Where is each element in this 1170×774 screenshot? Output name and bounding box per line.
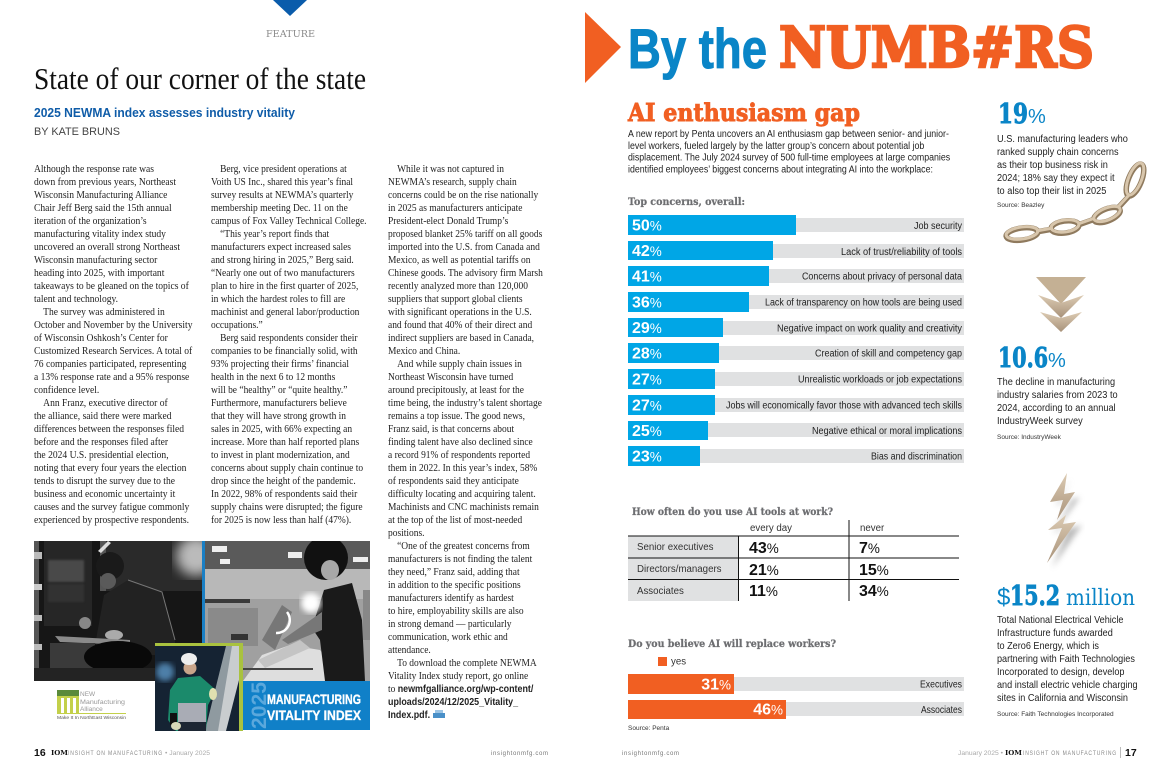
article column 1: Wisconsin manufacturing sector xyxy=(34,255,158,266)
footer: left page: IOM xyxy=(51,749,68,757)
intro text: level workers, fueled largely by the latter group’s concern about potential job xyxy=(628,140,924,151)
article column 2: Berg said respondents consider their xyxy=(220,333,358,344)
stat: 19%: to also top their list in 2025 xyxy=(997,186,1106,197)
table: ai tool use: 15% xyxy=(859,562,889,579)
article column 2: Berg, vice president operations at xyxy=(220,164,347,175)
stat: 19%: Source: Beazley xyxy=(997,202,1045,209)
logo: new manufacturing alliance: Alliance xyxy=(80,706,103,713)
table: ai tool use xyxy=(628,520,959,601)
logo: new manufacturing alliance xyxy=(57,690,126,721)
bar chart: top concerns: 23% xyxy=(632,448,662,466)
article column 3: in 2025 as manufacturers anticipate xyxy=(388,203,523,214)
article column 1: business and economic uncertainty it xyxy=(34,489,175,500)
article column 2: companies to be financially solid, with xyxy=(211,346,358,357)
footer: right page xyxy=(622,747,1137,759)
divider: blue rule xyxy=(202,541,205,681)
chart heading: replace workers: Do you believe AI will replace workers? xyxy=(628,638,836,650)
article column 3: positions. xyxy=(388,528,425,539)
icon: down arrows xyxy=(1036,277,1086,332)
article column 2: 93% projecting their firms’ financial xyxy=(211,359,349,370)
article column 3: and found that 40% of their direct and xyxy=(388,320,532,331)
article column 1: takeaways to be gleaned on the topics of xyxy=(34,281,189,292)
callout: manufacturing vitality index: 2025 xyxy=(248,682,271,729)
intro text: displacement. The July 2024 survey of 500 full-time employees at large companies xyxy=(628,152,950,163)
bar chart: top concerns: Lack of transparency on how tools are being used xyxy=(765,298,962,308)
stat: 10.6%: 10.6 xyxy=(998,343,1048,374)
article column 1: talent and technology. xyxy=(34,294,118,305)
photo: man at workbench xyxy=(34,541,202,681)
article column 1: a 13% response rate and a 95% response xyxy=(34,372,190,383)
stat: $15.2 million: partnering with Faith Technologies xyxy=(997,654,1135,665)
heading: ai enthusiasm gap: AI enthusiasm gap xyxy=(627,98,860,127)
bar chart: replace workers: Executives xyxy=(920,680,962,690)
article column 1: experienced by prospective respondents. xyxy=(34,515,189,526)
article column 3: Mexico and China. xyxy=(388,346,460,357)
bar chart: top concerns: Concerns about privacy of personal data xyxy=(802,272,962,282)
table: ai tool use: Directors/managers xyxy=(637,564,722,575)
icon: blue section marker xyxy=(273,0,307,16)
article column 2: for 2025 is now less than half (47%). xyxy=(211,515,351,526)
article column 2: “Nearly one out of two manufacturers xyxy=(211,268,355,279)
table: ai tool use: Associates xyxy=(637,586,684,597)
article column 1: Wisconsin Manufacturing Alliance xyxy=(34,190,168,201)
article column 3: Mexico, as well as potential tariffs on xyxy=(388,255,530,266)
stat: $15.2 million: $ xyxy=(997,584,1010,611)
article column 3: NEWMA’s research, supply chain xyxy=(388,177,517,188)
heading: by the numbers: NUMB#RS xyxy=(779,15,1094,81)
heading: by the numbers: By the xyxy=(628,17,767,80)
bar chart: top concerns: Lack of trust/reliability of tools xyxy=(841,247,962,258)
stat: $15.2 million: sites in California and Wisconsin xyxy=(997,693,1128,704)
article column 1: Ann Franz, executive director of xyxy=(43,398,168,409)
bar chart: top concerns: Job security xyxy=(914,221,962,232)
article column 3: uploads/2024/12/2025_Vitality_ xyxy=(388,697,519,707)
bar chart: replace workers: Associates xyxy=(921,705,962,716)
article column 2: In 2022, 98% of respondents said their xyxy=(211,489,358,500)
article column 1: down from previous years, Northeast xyxy=(34,177,176,188)
article column 3: finding talent have also declined since xyxy=(388,437,533,448)
article column 2: and strong hiring in 2025,” Berg said. xyxy=(211,255,354,266)
article column 1: the alliance, said there were marked xyxy=(34,411,171,422)
stat: $15.2 million: 15.2 xyxy=(1010,581,1060,612)
section label: feature: FEATURE xyxy=(266,29,315,40)
bar chart: top concerns xyxy=(628,215,964,466)
icon: chain xyxy=(1005,161,1147,242)
stat: 10.6%: IndustryWeek survey xyxy=(997,416,1083,427)
article column 1: Chair Jeff Berg said the 15th annual xyxy=(34,203,172,214)
article column 1: iteration of the organization’s xyxy=(34,216,147,227)
article column 3: To download the complete NEWMA xyxy=(397,658,537,669)
article column 3: Franz said, is that concerns about xyxy=(388,424,514,435)
footer: left page: INSIGHT ON MANUFACTURING xyxy=(68,751,163,757)
article column 3: suppliers that support global clients xyxy=(388,294,523,305)
title: State of our corner of the state xyxy=(34,61,366,96)
article column 3: of respondents said they anticipate xyxy=(388,476,519,487)
article column 2: sales in 2025, with 66% expecting an xyxy=(211,424,352,435)
callout: manufacturing vitality index: MANUFACTURING xyxy=(267,691,361,707)
chart heading: top concerns: Top concerns, overall: xyxy=(628,196,745,208)
article column 2: supply chains were disrupted; the figure xyxy=(211,502,363,513)
logo: new manufacturing alliance: NEW xyxy=(80,691,96,698)
icon: orange arrow xyxy=(585,12,621,83)
stat: $15.2 million: Total National Electrical Vehicle xyxy=(997,615,1123,626)
stat: 10.6% xyxy=(997,343,1118,441)
stat: 10.6%: The decline in manufacturing xyxy=(997,377,1115,388)
article column 1: October and November by the University xyxy=(34,320,193,331)
stat: $15.2 million: Infrastructure funds awarded xyxy=(997,628,1113,639)
bar chart: top concerns: Jobs will economically favor those with advanced tech skills xyxy=(726,400,962,412)
footer: left page: insightonmfg.com xyxy=(491,751,548,757)
bar chart: replace workers: 46% xyxy=(753,702,783,718)
icon: lightning bolt xyxy=(1047,473,1082,568)
subtitle: 2025 NEWMA index assesses industry vitality xyxy=(34,106,295,120)
stat: $15.2 million xyxy=(997,581,1138,718)
legend: yes xyxy=(658,656,686,668)
article column 1: uncovered an overall strong Northeast xyxy=(34,242,180,253)
article column 3: to xyxy=(388,684,398,695)
article column 2: in which the hardest roles to fill are xyxy=(211,294,346,305)
article column 3: in addition to the specific positions xyxy=(388,580,521,591)
article column 1: Although the response rate was xyxy=(34,164,154,175)
article column 3: Chinese goods. The advisory firm Marsh xyxy=(388,268,543,279)
table: ai tool use: 21% xyxy=(749,562,779,579)
article column 1: noting that every four years the election xyxy=(34,463,186,474)
stat: $15.2 million: and install electric vehicle charging xyxy=(997,680,1138,691)
stat: 19%: ranked supply chain concerns xyxy=(997,147,1119,158)
bar chart: replace workers: 31% xyxy=(701,676,731,694)
article column 2: occupations.” xyxy=(211,320,263,331)
article column 1: tends to disrupt the survey due to the xyxy=(34,476,176,487)
article column 2: drop since the height of the pandemic. xyxy=(211,476,356,487)
article column 1: differences between the responses filed xyxy=(34,424,184,435)
bar chart: top concerns: 50% xyxy=(632,218,662,234)
article column 3: difficulty locating and acquiring talent. xyxy=(388,489,536,500)
stat: 19% xyxy=(997,99,1128,209)
article column 3: President-elect Donald Trump’s xyxy=(388,216,508,227)
stat: $15.2 million: to Zero6 Energy, which is xyxy=(997,641,1099,652)
article column 2: manufacturers expect increased sales xyxy=(211,242,351,253)
table: ai tool use: every day xyxy=(750,523,792,534)
article column 2: increase. More than half reported plans xyxy=(211,437,359,448)
callout: manufacturing vitality index: VITALITY INDEX xyxy=(267,707,362,723)
article column 2: health in the next 6 to 12 months xyxy=(211,372,335,383)
source: penta: Source: Penta xyxy=(628,725,670,732)
table: ai tool use: 7% xyxy=(859,540,880,557)
article column 2: Furthermore, manufacturers believe xyxy=(211,398,347,409)
article column 3: While it was not captured in xyxy=(397,164,504,175)
article column 3: to hire, employability skills are also xyxy=(388,606,524,617)
logo: new manufacturing alliance: Make It In NorthEast Wisconsin xyxy=(57,715,126,721)
stat: 10.6%: industry salaries from 2023 to xyxy=(997,390,1118,401)
article column 1: causes and the survey fatigue commonly xyxy=(34,502,189,513)
article column 3: at the top of the list of most-needed xyxy=(388,515,522,526)
bar chart: top concerns: Bias and discrimination xyxy=(871,452,962,462)
article column 2: Voith US Inc., shared this year’s final xyxy=(211,177,353,188)
stat: 19%: 2024; 18% say they expect it xyxy=(997,173,1115,184)
footer: right page: January 2025 • xyxy=(958,751,1003,757)
article column 3: concerns could be on the rise nationally xyxy=(388,190,538,201)
article column 2: membership meeting Dec. 11 on the xyxy=(211,203,348,214)
bar chart: top concerns: Creation of skill and competency gap xyxy=(815,348,962,360)
article column 1: The survey was administered in xyxy=(43,307,165,318)
table heading: how often: How often do you use AI tools at work? xyxy=(632,506,833,518)
table: ai tool use: 43% xyxy=(749,540,779,557)
heading: by the numbers xyxy=(628,15,1094,81)
footer: right page: INSIGHT ON MANUFACTURING xyxy=(1023,751,1117,757)
article column 1: Customized Research Services. A total of xyxy=(34,346,193,357)
bar chart: top concerns: 27% xyxy=(632,398,662,414)
article column 3: Northeast Wisconsin have turned xyxy=(388,372,513,383)
bar chart: top concerns: 25% xyxy=(632,423,662,440)
photo: woman at saw xyxy=(205,536,370,681)
footer: left page xyxy=(34,747,548,759)
callout: manufacturing vitality index xyxy=(243,681,370,730)
bar chart: replace workers xyxy=(628,674,964,719)
article column 3: a record 91% of respondents reported xyxy=(388,450,530,461)
stat: 10.6%: Source: IndustryWeek xyxy=(997,434,1062,441)
bar chart: top concerns: 42% xyxy=(632,243,662,260)
bar chart: top concerns: Unrealistic workloads or job expectations xyxy=(798,374,962,386)
footer: right page: IOM xyxy=(1005,749,1022,757)
article column 3: indirect suppliers are based in Canada, xyxy=(388,333,534,344)
stat: $15.2 million: Source: Faith Technologies Incorporated xyxy=(997,711,1114,718)
stat: 19%: % xyxy=(1028,106,1046,128)
stat: $15.2 million: million xyxy=(1066,586,1135,611)
article column 2: concerns about supply chain continue to xyxy=(211,463,363,474)
byline: BY KATE BRUNS xyxy=(34,126,120,138)
article column 2: plan to hire in the first quarter of 2025, xyxy=(211,281,358,292)
article column 2: machinist and general labor/production xyxy=(211,307,359,318)
bar chart: top concerns: 29% xyxy=(632,320,662,337)
stat: 19%: 19 xyxy=(998,99,1028,130)
intro text: identified employees’ biggest concerns about integrating AI into the workplace: xyxy=(628,164,933,175)
bar chart: top concerns: 41% xyxy=(632,268,662,286)
table: ai tool use: 34% xyxy=(859,583,889,600)
article column 2: “This year’s report finds that xyxy=(220,229,329,240)
article column 3: them in 2022. In this year’s index, 58% xyxy=(388,463,537,474)
article column 2: survey results at NEWMA’s quarterly xyxy=(211,190,353,201)
article column 1: confidence level. xyxy=(34,385,99,396)
stat: $15.2 million: Incorporated to design, develop xyxy=(997,667,1124,678)
article column 3: newmfgalliance.org/wp-content/ xyxy=(398,684,534,694)
article column 3: recently analyzed more than 120,000 xyxy=(388,281,528,292)
table: ai tool use: 11% xyxy=(749,583,778,600)
article column 1: manufacturing vitality index study xyxy=(34,229,166,240)
bar chart: top concerns: Negative impact on work quality and creativity xyxy=(777,324,962,334)
footer: left page: 16 xyxy=(34,747,46,759)
article column 3: manufacturers is not finding the talent xyxy=(388,554,532,565)
article column 3: around precipitously, at least for the xyxy=(388,385,525,396)
photo: welder in green jacket xyxy=(155,643,243,731)
legend: yes: yes xyxy=(671,656,686,668)
bar chart: top concerns: 27% xyxy=(632,372,662,388)
article column 2: campus of Fox Valley Technical College. xyxy=(211,216,367,227)
article column 3: And while supply chain issues in xyxy=(397,359,522,370)
table: ai tool use: Senior executives xyxy=(637,542,714,553)
footer: right page: insightonmfg.com xyxy=(622,751,679,757)
article column 1: 76 companies participated, representing xyxy=(34,359,186,370)
article column 3: in strong demand — particularly xyxy=(388,619,511,630)
stat: 19%: as their top business risk in xyxy=(997,160,1108,171)
article column 1: before and the responses filed after xyxy=(34,437,169,448)
article column 3: manufacturers identify as hardest xyxy=(388,593,514,604)
article column 1: of Wisconsin Oshkosh’s Center for xyxy=(34,333,168,344)
stat: 10.6%: 2024, according to an annual xyxy=(997,403,1116,414)
article column 3: imported into the U.S. from Canada and xyxy=(388,242,540,253)
bar chart: top concerns: Negative ethical or moral implications xyxy=(812,426,962,437)
article column 3: remains a top issue. The good news, xyxy=(388,411,525,422)
article column 3: Vitality Index study report, go online xyxy=(388,671,529,682)
intro text: A new report by Penta uncovers an AI enthusiasm gap between senior- and junior- xyxy=(628,129,949,139)
article column 3: “One of the greatest concerns from xyxy=(397,541,530,552)
article column 2: to invest in plant modernization, and xyxy=(211,450,350,461)
article column 3: Machinists and CNC machinists remain xyxy=(388,502,539,513)
footer: right page: 17 xyxy=(1125,747,1137,759)
article column 3: proposed blanket 25% tariff on all goods xyxy=(388,229,542,240)
icon: printer xyxy=(433,710,445,718)
article column 2: will be “healthy” or “quite healthy.” xyxy=(211,385,347,396)
article column 1: the 2024 U.S. presidential election, xyxy=(34,450,169,461)
table: ai tool use: never xyxy=(860,523,885,534)
logo: new manufacturing alliance: Manufacturing xyxy=(80,699,125,706)
article column 3: with significant operations in the U.S. xyxy=(388,307,532,318)
article column 2: that they will have strong growth in xyxy=(211,411,346,422)
article column 1: heading into 2025, with important xyxy=(34,268,165,279)
bar chart: top concerns: 36% xyxy=(632,294,662,312)
article column 3: communication, work ethic and xyxy=(388,632,508,643)
bar chart: top concerns: 28% xyxy=(632,346,662,362)
article column 3: time being, the industry’s talent shortage xyxy=(388,398,542,409)
article column 3: Index.pdf. xyxy=(388,710,430,720)
stat: 19%: U.S. manufacturing leaders who xyxy=(997,134,1128,145)
stat: 10.6%: % xyxy=(1048,350,1066,372)
footer: left page: • January 2025 xyxy=(165,751,211,757)
article column 3: they need,” Franz said, adding that xyxy=(388,567,520,578)
article column 3: attendance. xyxy=(388,645,431,656)
